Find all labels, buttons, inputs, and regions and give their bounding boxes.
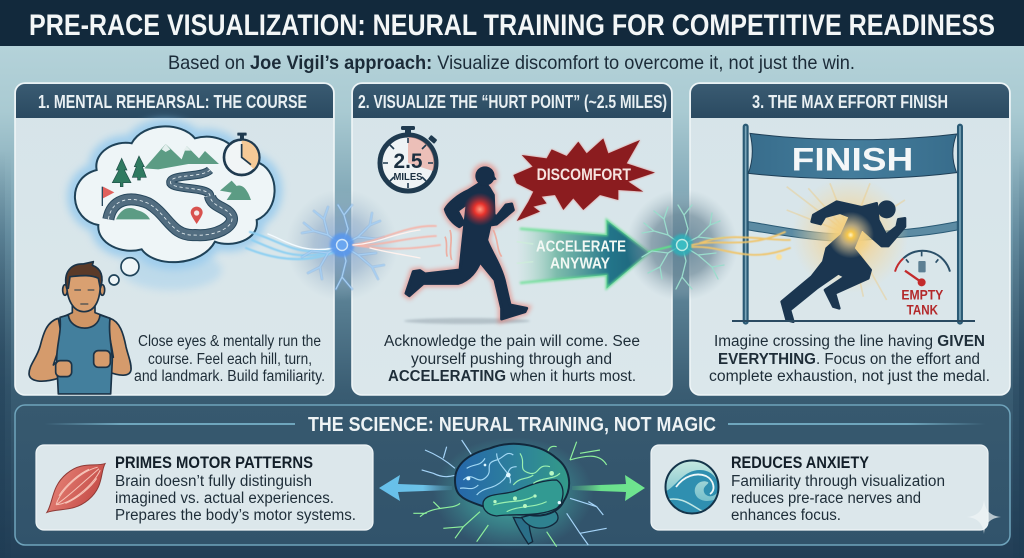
panel 1 text: course. Feel each hill, turn,: [148, 351, 312, 368]
panel 2 text: yourself pushing through and: [411, 351, 612, 368]
ground line: [732, 320, 975, 322]
hills: [116, 208, 150, 219]
panel 3 text: EVERYTHING. Focus on the effort and: [718, 351, 980, 368]
gold signal to finish: [692, 232, 790, 260]
finish gate: [746, 127, 960, 322]
arrow: left to motor patterns: [379, 475, 452, 501]
clock: [237, 133, 247, 136]
panel 3: max effort finish: [690, 83, 1010, 395]
brain stem and cerebellum: [513, 517, 533, 544]
panel 2 header: [353, 84, 671, 118]
road: [108, 196, 232, 235]
panel 1 header: 1. MENTAL REHEARSAL: THE COURSE: [38, 91, 307, 112]
panel 1 header: [16, 84, 333, 118]
anxiety text: Familiarity through visualization: [731, 473, 945, 490]
empty tank gauge: TANK: [907, 302, 938, 317]
green lightning: [413, 442, 607, 547]
panel 3 text: Imagine crossing the line having GIVEN: [714, 333, 985, 350]
blue neuron cell: [302, 205, 384, 289]
icon: wave: [664, 460, 722, 516]
neuron 2 with signals: [626, 189, 790, 301]
discomfort burst: [513, 138, 655, 221]
callout: reduces anxiety: [651, 445, 988, 530]
accelerate anyway arrow: ACCELERATE: [536, 239, 626, 256]
sparkle mark: [967, 500, 1001, 534]
brain folds: [460, 453, 517, 495]
stopwatch 2.5 miles: MILES: [394, 171, 422, 183]
panel 3 header: 3. THE MAX EFFORT FINISH: [752, 91, 948, 112]
arrow: right to anxiety: [572, 475, 645, 501]
panel 1 text: Close eyes & mentally run the: [138, 333, 321, 350]
accelerate anyway arrow: ANYWAY: [550, 255, 610, 272]
empty tank gauge: [895, 251, 950, 317]
flag: [100, 187, 104, 206]
mountains: [144, 144, 219, 169]
teal neuron cell: [642, 205, 724, 289]
temporal lobe: [483, 480, 563, 516]
thought cloud with course map: [75, 126, 275, 290]
blue signal from cloud: [246, 232, 335, 259]
map pin: [191, 207, 203, 224]
blue lightning: [422, 440, 607, 545]
primes text: imagined vs. actual experiences.: [115, 490, 334, 507]
panel 2: hurt point: [352, 83, 672, 395]
primes text: Brain doesn’t fully distinguish: [115, 473, 312, 490]
icon: muscle: [36, 451, 116, 525]
anxiety text: [731, 454, 945, 524]
athlete with closed eyes: [29, 262, 131, 394]
ground shadow: [404, 318, 530, 324]
panel 2 text: [384, 333, 640, 385]
panel: the science: [15, 405, 1010, 550]
running silhouette with pain glow: [406, 166, 527, 319]
finish gate: FINISH: [792, 141, 913, 178]
panel 2 header: 2. VISUALIZE THE “HURT POINT” (~2.5 MILES): [358, 91, 667, 112]
subtitle: Based on Joe Vigil’s approach: Visualize discomfort to overcome it, not just the win.: [168, 52, 855, 74]
panel 3 text: complete exhaustion, not just the medal.: [709, 368, 990, 385]
panel 2 text: Acknowledge the pain will come. See: [384, 333, 640, 350]
stopwatch 2.5 miles: [380, 126, 437, 191]
empty tank gauge: EMPTY: [901, 287, 943, 302]
panel 3 text: [709, 333, 990, 385]
panel 1 text: and landmark. Build familiarity.: [134, 368, 325, 385]
science heading: THE SCIENCE: NEURAL TRAINING, NOT MAGIC: [308, 413, 716, 436]
anxiety text: REDUCES ANXIETY: [731, 454, 869, 472]
thought bubbles: [121, 258, 139, 276]
pink signal to runner: [353, 226, 440, 258]
anxiety text: enhances focus.: [731, 507, 841, 524]
accelerate anyway arrow: [517, 220, 649, 288]
anxiety text: reduces pre-race nerves and: [731, 490, 921, 507]
panel 1: mental rehearsal: [15, 83, 334, 395]
panel 1 text: [134, 333, 325, 385]
pine trees: [112, 156, 146, 187]
finish tape: [748, 222, 957, 242]
panel 3 header: [691, 84, 1009, 118]
title banner: [0, 0, 1024, 46]
primes text: Prepares the body’s motor systems.: [115, 507, 356, 524]
sprinter with energy burst: [782, 177, 908, 322]
cerebrum: [455, 444, 569, 516]
primes text: [115, 454, 356, 524]
brain with neural lightning: [413, 437, 607, 550]
neuron 1 with signals: [246, 189, 440, 301]
panel 2 text: ACCELERATING when it hurts most.: [388, 368, 636, 385]
green tip link: [648, 246, 672, 252]
synapse sparks: [466, 464, 561, 508]
primes text: PRIMES MOTOR PATTERNS: [115, 454, 313, 472]
callout: primes motor patterns: [36, 445, 373, 530]
stopwatch 2.5 miles: 2.5: [394, 150, 423, 173]
discomfort burst: DISCOMFORT: [537, 166, 631, 184]
